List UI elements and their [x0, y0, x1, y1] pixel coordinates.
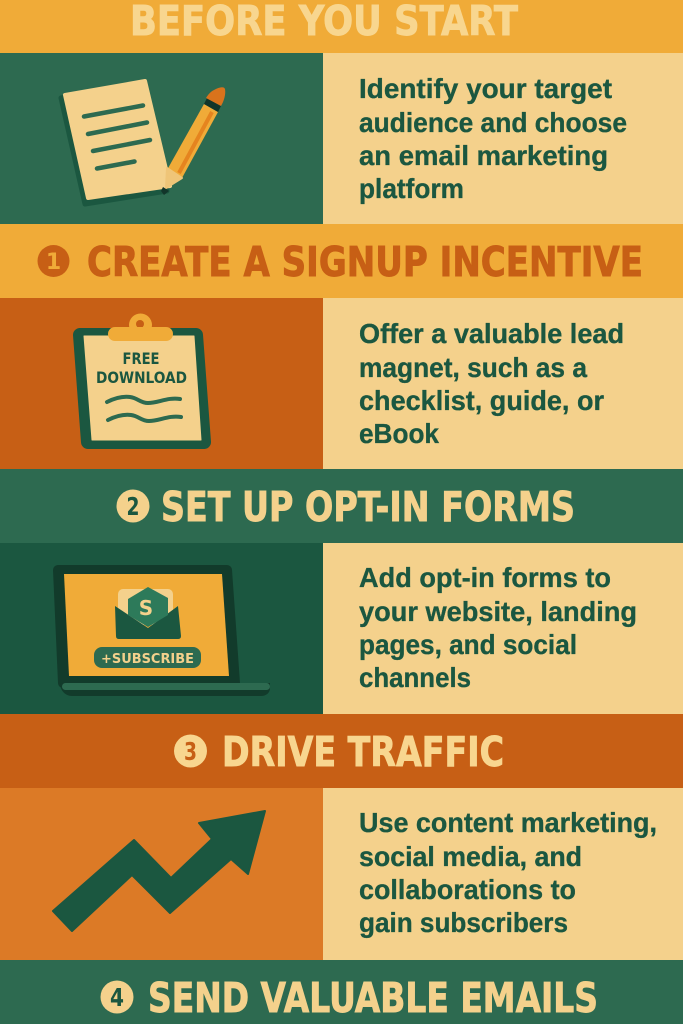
heading band: step 3 — [0, 714, 683, 788]
heading band: step 1 — [0, 224, 683, 298]
panel: step 3 — [0, 788, 683, 960]
text: step 2: Add opt-in forms to — [359, 562, 611, 593]
heading band: step 4 — [0, 960, 683, 1024]
number badge 3 — [174, 734, 207, 768]
icon: clipboard free download — [80, 314, 204, 442]
text: step 1: eBook — [359, 418, 439, 449]
heading band: before you start — [0, 0, 683, 53]
text: step 2 — [359, 562, 637, 693]
text: before you start: audience and choose — [359, 107, 627, 138]
text: step 3: social media, and — [359, 841, 582, 872]
panel: step 1 — [0, 298, 683, 469]
panel: step 2 — [0, 543, 683, 714]
number badge 1 — [38, 245, 70, 277]
icon: laptop subscribe: S — [139, 596, 153, 620]
heading band: step 2 — [0, 469, 683, 543]
text: step 2: your website, landing — [359, 596, 637, 627]
icon: clipboard free download: FREE — [122, 349, 160, 368]
text: before you start — [359, 73, 627, 204]
heading band: step 3: DRIVE TRAFFIC — [222, 728, 504, 776]
icon: rising arrow — [53, 811, 265, 931]
icon: laptop subscribe: +SUBSCRIBE — [101, 651, 194, 667]
number badge 2: 2 — [126, 492, 140, 521]
text: step 2: channels — [359, 662, 471, 693]
icon: laptop subscribe — [58, 570, 270, 696]
text: before you start: Identify your target — [359, 73, 612, 104]
heading band: step 2: SET UP OPT-IN FORMS — [161, 483, 575, 531]
text: before you start: platform — [359, 173, 464, 204]
text: step 3 — [359, 807, 657, 938]
number badge 2 — [116, 490, 150, 522]
icon: clipboard free download: DOWNLOAD — [96, 368, 187, 387]
number badge 4: 4 — [110, 983, 124, 1012]
panel: before you start — [0, 53, 683, 224]
text: step 3: Use content marketing, — [359, 807, 657, 838]
text: step 1: checklist, guide, or — [359, 385, 604, 416]
number badge 4 — [100, 980, 134, 1014]
icon: paper and pencil — [61, 81, 225, 204]
text: step 3: collaborations to — [359, 874, 576, 905]
text: step 1: Offer a valuable lead — [359, 318, 624, 349]
number badge 1: 1 — [46, 250, 61, 275]
text: step 2: pages, and social — [359, 629, 577, 660]
text: before you start: an email marketing — [359, 140, 608, 171]
text: step 1: magnet, such as a — [359, 352, 587, 383]
number badge 3: 3 — [184, 737, 197, 766]
text: step 3: gain subscribers — [359, 907, 568, 938]
text: step 1 — [359, 318, 624, 449]
